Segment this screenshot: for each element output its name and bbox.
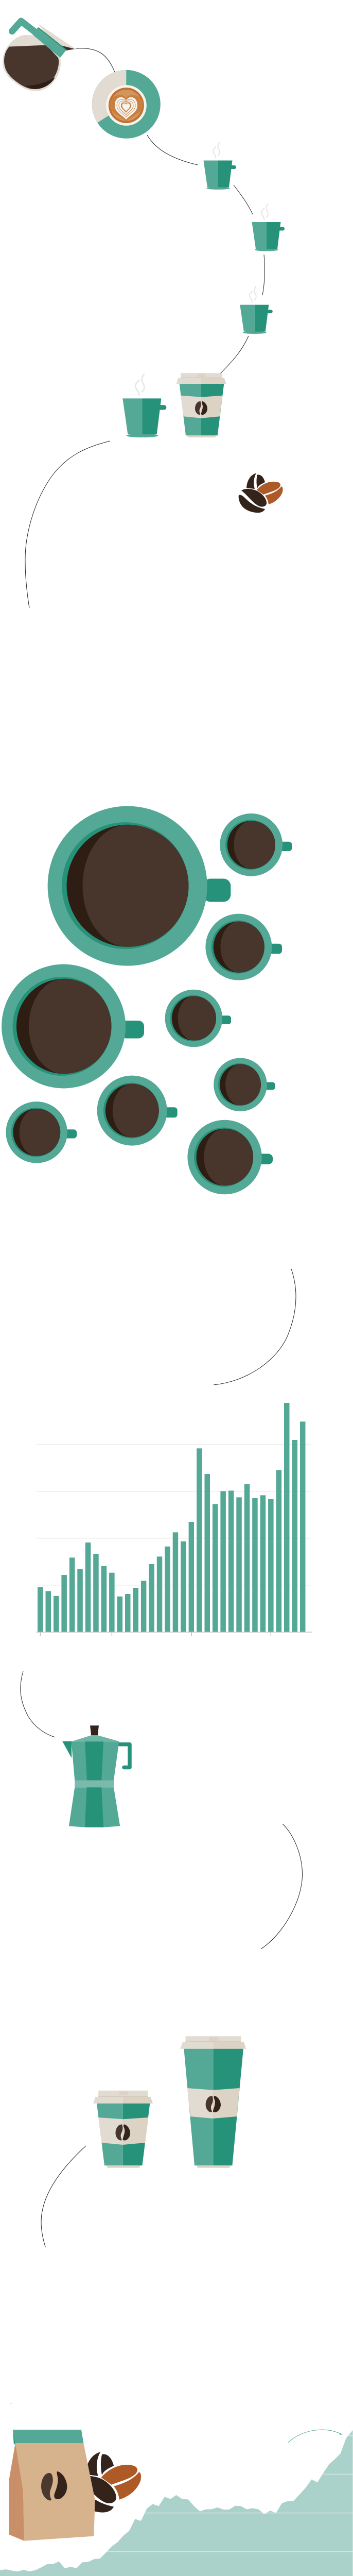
- arrow curve: [214, 1269, 296, 1385]
- arrow curve: [41, 2146, 86, 2247]
- arrow curve: [261, 1824, 303, 1949]
- icon: coffee beans behind bag: [74, 2452, 141, 2513]
- area chart: [0, 2430, 353, 2576]
- icon: coffee pot pouring: [3, 21, 76, 91]
- icon: takeaway cup medium: [93, 2091, 153, 2168]
- icon: coffee cup 2: [252, 204, 285, 251]
- chart: cups seen from above: [2, 806, 292, 1194]
- icon: coffee bag: [9, 2430, 95, 2541]
- icon: large coffee cup: [122, 374, 166, 437]
- cup top view 2: [220, 814, 292, 876]
- cup top view 8: [6, 1101, 77, 1163]
- small axis mark: [10, 2403, 12, 2404]
- arrow curve: [21, 1671, 55, 1737]
- cup top view 3: [205, 914, 282, 980]
- icon: coffee beans: [239, 473, 283, 513]
- icon: coffee cup 1: [204, 142, 236, 190]
- icon: moka pot: [62, 1725, 130, 1827]
- cup top view 9: [187, 1120, 273, 1194]
- cup top view large left: [2, 964, 144, 1088]
- arrow curve: [25, 441, 110, 608]
- cup top view 6: [214, 1058, 275, 1111]
- arrow curve: [234, 185, 253, 214]
- donut chart with latte: [92, 70, 161, 139]
- arrow curve: donut to cup: [147, 135, 198, 165]
- cup top view 7: [97, 1076, 178, 1146]
- arrow curve: [220, 336, 249, 374]
- icon: coffee cup 3: [240, 286, 273, 334]
- cup top view large: [48, 806, 231, 966]
- icon: takeaway cup large: [180, 2036, 246, 2168]
- arrow curve: pot to donut: [76, 48, 115, 72]
- annotation arrow: [288, 2430, 343, 2443]
- icon: takeaway cup small: [177, 373, 226, 437]
- cup top view 5: [165, 990, 231, 1047]
- bar chart: [36, 1403, 312, 1636]
- arrow curve: [262, 255, 264, 295]
- icon: latte art: [106, 85, 147, 126]
